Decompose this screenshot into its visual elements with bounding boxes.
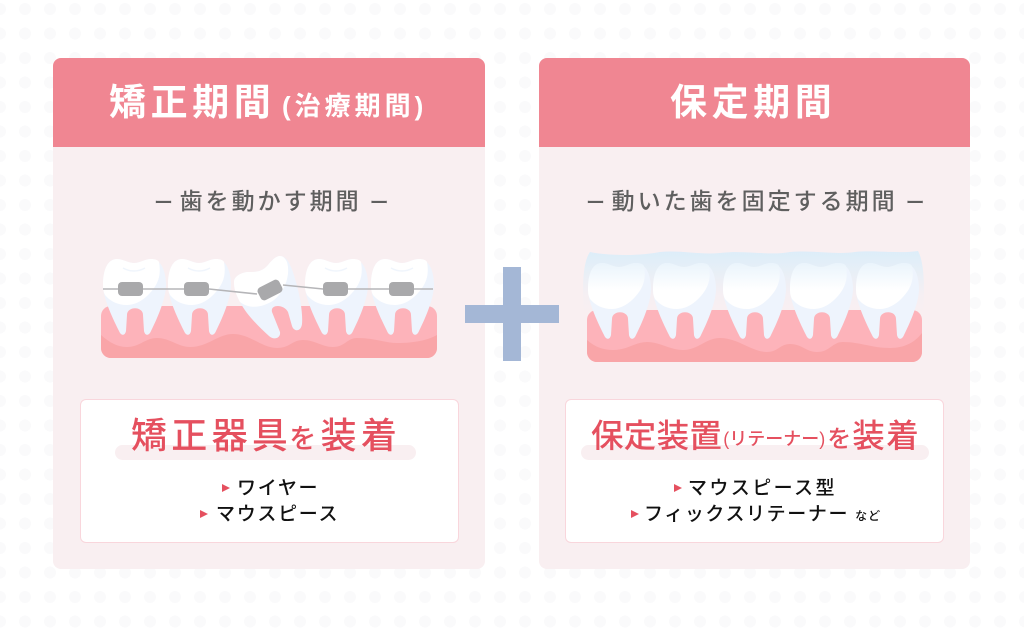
panel: 矯正期間 [53,58,485,569]
callout title: 矯正器具を装着: 矯正器具を装着 [131,415,401,456]
list bullet [200,510,208,518]
heading: 矯正期間: 矯正期間 [109,82,275,123]
callout box: 保定装置 [565,399,944,543]
callout box: 矯正器具 [80,399,459,543]
gums with braces teeth [101,306,437,358]
aligner tray [583,251,924,312]
callout title: 保定装置(リテーナー)を装着: 保定装置(リテーナー)を装着 [591,418,920,454]
brackets [118,278,414,302]
title highlight right [581,445,929,460]
heading note: 治療期間: (治療期間) [282,91,427,121]
gums [587,310,922,362]
teeth row [588,263,919,339]
title highlight left [115,445,416,460]
list bullet [222,484,230,492]
list item: フィックスリテーナーなど: フィックスリテーナー など [644,504,881,525]
list bullet [674,484,682,492]
subheading: 歯を動かす期間: ー歯を動かす期間 ー [154,188,389,214]
list item: マウスピース: マウスピース [216,504,339,525]
list item: ワイヤー: ワイヤー [237,478,319,499]
wire [103,285,433,294]
heading: 保定期間: 保定期間 [670,82,836,123]
subheading: 動いた歯を固定する期間: ー動いた歯を固定する期間 ー [586,188,925,214]
list bullet [631,510,639,518]
list item: マウスピース型: マウスピース型 [688,478,837,499]
teeth row [103,256,434,338]
panel: 保定期間 [539,58,970,569]
